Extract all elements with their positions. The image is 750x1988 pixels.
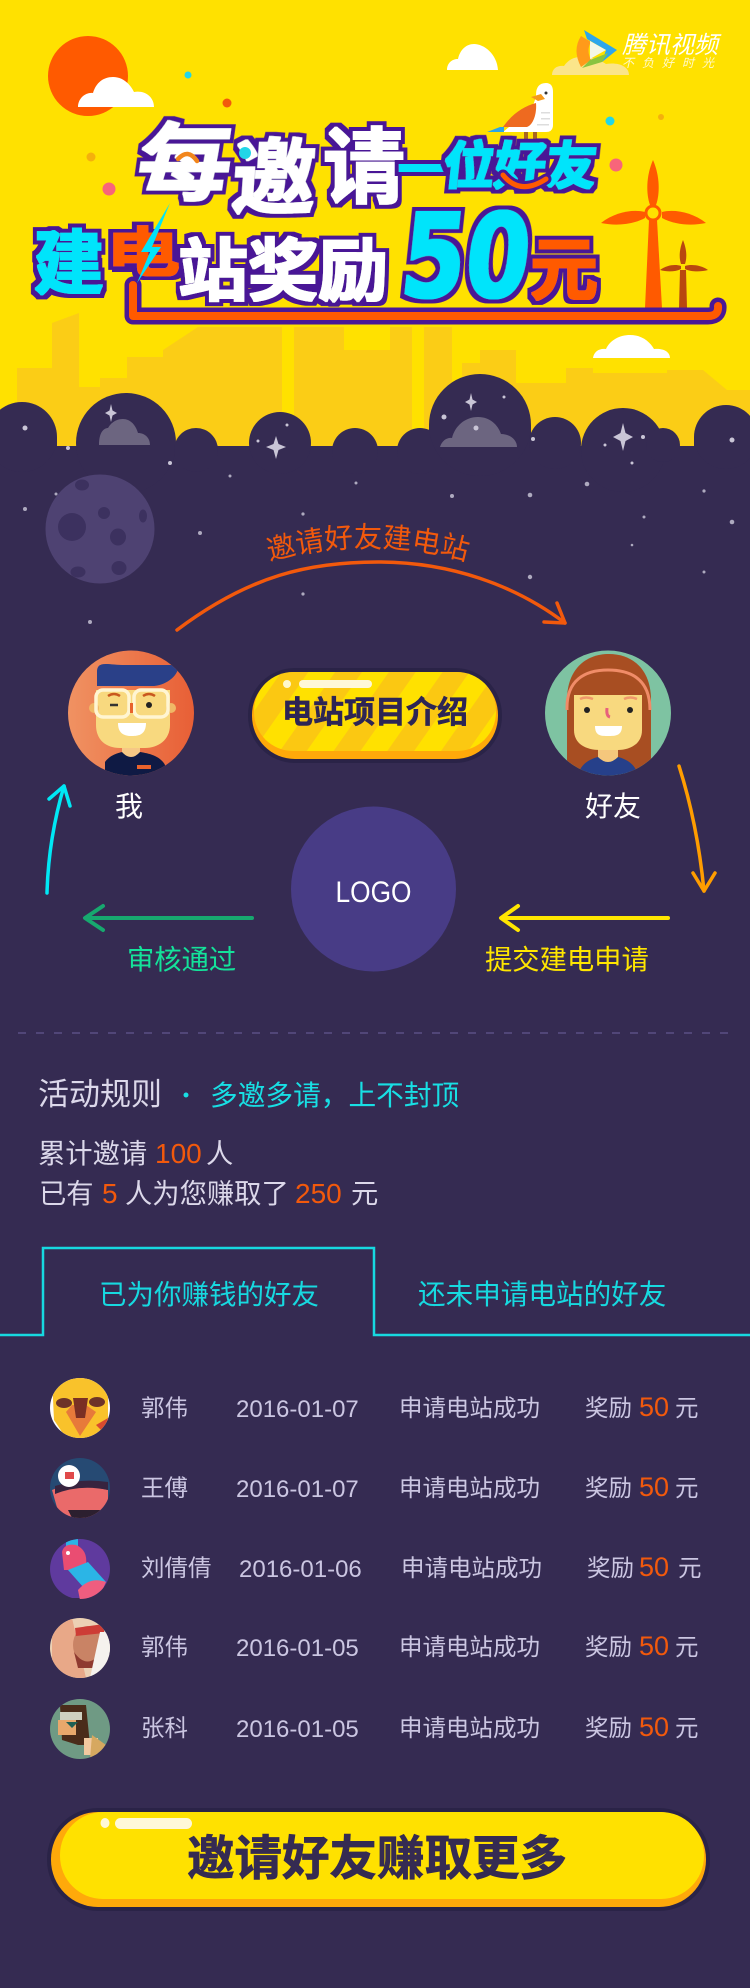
earned stat: 元 <box>351 1178 378 1209</box>
earned stat: 250 <box>295 1178 342 1209</box>
smile under 好 <box>503 175 546 187</box>
lightning bolt <box>137 203 170 283</box>
reward: 元 <box>678 1555 702 1581</box>
arrow: review passed (green) <box>85 906 252 930</box>
avatar: me <box>68 650 194 776</box>
LOGO circle: LOGO <box>336 876 412 909</box>
logo play icon <box>576 30 617 68</box>
avatar: blue figure <box>50 1458 110 1518</box>
underline power cable <box>133 285 718 316</box>
status: 申请电站成功 <box>399 1715 540 1741</box>
panel: friend tabs <box>0 1248 750 1335</box>
swoosh inside 每 <box>178 154 197 161</box>
dark cloud horizon <box>0 374 750 493</box>
title stroke 一: 一 <box>398 144 444 196</box>
arrow: friend applies (orange) <box>679 766 715 891</box>
arrow: submit application (yellow) <box>501 906 668 930</box>
rules heading: 活动规则 <box>38 1077 162 1112</box>
avatar: painted face <box>50 1618 110 1678</box>
moon <box>46 474 154 584</box>
reward: 50 <box>639 1392 669 1422</box>
panel: invite flow diagram <box>23 474 734 975</box>
date: 2016-01-06 <box>239 1556 362 1583</box>
tab label active: 已为你赚钱的好友 <box>99 1279 319 1310</box>
LOGO circle <box>291 806 456 972</box>
curved label 邀请好友建电站: 邀请好友建电站 <box>266 522 470 562</box>
row: 郭伟 01-07 <box>50 1378 698 1438</box>
white cloud by sun <box>78 77 154 107</box>
title char 元: 元 <box>530 233 598 309</box>
reward: 奖励 <box>585 1634 632 1660</box>
reward: 元 <box>675 1395 698 1421</box>
title: line one 每邀请一位好友 <box>131 117 600 225</box>
button: 电站项目介绍 <box>248 668 502 763</box>
white cloud right <box>593 335 670 358</box>
name: 张科 <box>141 1715 188 1741</box>
logo slogan: 不负好时光 <box>622 56 715 70</box>
avatar: bearded man <box>50 1699 110 1759</box>
title char 请: 请 <box>323 123 405 214</box>
row: 张科 <box>50 1699 698 1759</box>
arrow: back to me (cyan) <box>47 786 70 893</box>
reward: 奖励 <box>585 1715 632 1741</box>
rules slogan: 多邀多请，上不封顶 <box>210 1080 459 1111</box>
total invited stat: 100 <box>155 1138 202 1169</box>
title number 50: 50 <box>395 190 537 325</box>
avatar: friend <box>545 650 671 776</box>
label 审核通过: 审核通过 <box>127 944 236 975</box>
title char 电: 电 <box>106 224 180 282</box>
title small 位好友: 位好友 <box>441 138 600 195</box>
title char 邀: 邀 <box>229 134 319 225</box>
earned stat: 5 <box>102 1178 118 1209</box>
earned stat: 已有 <box>39 1178 94 1209</box>
tab label inactive: 还未申请电站的好友 <box>418 1279 666 1310</box>
title char 建: 建 <box>34 225 104 303</box>
reward: 50 <box>639 1552 669 1582</box>
arrow: invite arc <box>177 562 565 630</box>
grey cloud left <box>99 419 150 445</box>
date: 2016-01-05 <box>236 1635 359 1662</box>
date: 2016-01-07 <box>236 1396 359 1423</box>
reward: 50 <box>639 1631 669 1661</box>
tab outline <box>0 1248 750 1335</box>
city skyline <box>17 313 750 450</box>
pale cloud behind logo <box>552 57 629 75</box>
windmill large <box>601 160 706 308</box>
total invited stat: 累计邀请 <box>38 1138 147 1169</box>
title: line two 建电站奖励50元 <box>34 190 598 325</box>
title char 每: 每 <box>131 117 239 211</box>
reward: 元 <box>675 1475 698 1501</box>
label 提交建电申请: 提交建电申请 <box>485 944 649 975</box>
status: 申请电站成功 <box>401 1555 542 1581</box>
tencent video logo <box>576 30 722 70</box>
cyan dot by 邀 <box>239 147 251 159</box>
date: 2016-01-07 <box>236 1476 359 1503</box>
decorative confetti dots <box>86 72 664 196</box>
reward: 奖励 <box>585 1475 632 1501</box>
status: 申请电站成功 <box>399 1475 540 1501</box>
windmill small <box>660 240 708 308</box>
label 我: 我 <box>115 791 143 822</box>
white cloud top <box>447 44 498 70</box>
sun <box>48 36 128 116</box>
avatar: purple monster <box>50 1538 110 1600</box>
status: 申请电站成功 <box>399 1634 540 1660</box>
row: 刘倩倩 <box>50 1538 702 1600</box>
star field <box>23 474 734 624</box>
reward: 元 <box>675 1715 698 1741</box>
rules dot <box>184 1092 188 1098</box>
row: 王傅 <box>50 1458 698 1518</box>
grey cloud right <box>440 417 517 447</box>
reward: 50 <box>639 1712 669 1742</box>
reward: 奖励 <box>587 1555 634 1581</box>
panel: friend list <box>50 1378 702 1759</box>
total invited stat: 人 <box>206 1138 233 1169</box>
earned stat: 人为您赚取了 <box>125 1178 289 1209</box>
name: 刘倩倩 <box>141 1555 212 1581</box>
avatar: yellow animal <box>50 1378 110 1438</box>
date: 2016-01-05 <box>236 1716 359 1743</box>
name: 王傅 <box>141 1475 188 1501</box>
title text 站奖励: 站奖励 <box>178 234 388 310</box>
label 好友: 好友 <box>585 791 641 822</box>
button: 电站项目介绍: 电站项目介绍 <box>282 695 468 730</box>
reward: 元 <box>675 1634 698 1660</box>
reward: 奖励 <box>585 1395 632 1421</box>
status: 申请电站成功 <box>399 1395 540 1421</box>
button: 邀请好友赚取更多: 邀请好友赚取更多 <box>187 1833 567 1886</box>
yellow sky <box>0 0 750 450</box>
logo wordmark: 腾讯视频 <box>622 32 722 59</box>
panel: activity rules <box>38 1077 459 1209</box>
seagull <box>487 83 553 140</box>
name: 郭伟 <box>141 1395 188 1421</box>
sparkle stars <box>22 393 734 465</box>
reward: 50 <box>639 1472 669 1502</box>
panel: header banner <box>0 0 750 493</box>
name: 郭伟 <box>141 1634 188 1660</box>
row: 郭伟 01-05 <box>50 1618 698 1678</box>
purple fill behind 电 <box>112 238 170 272</box>
button: 邀请好友赚取更多 <box>47 1808 710 1911</box>
